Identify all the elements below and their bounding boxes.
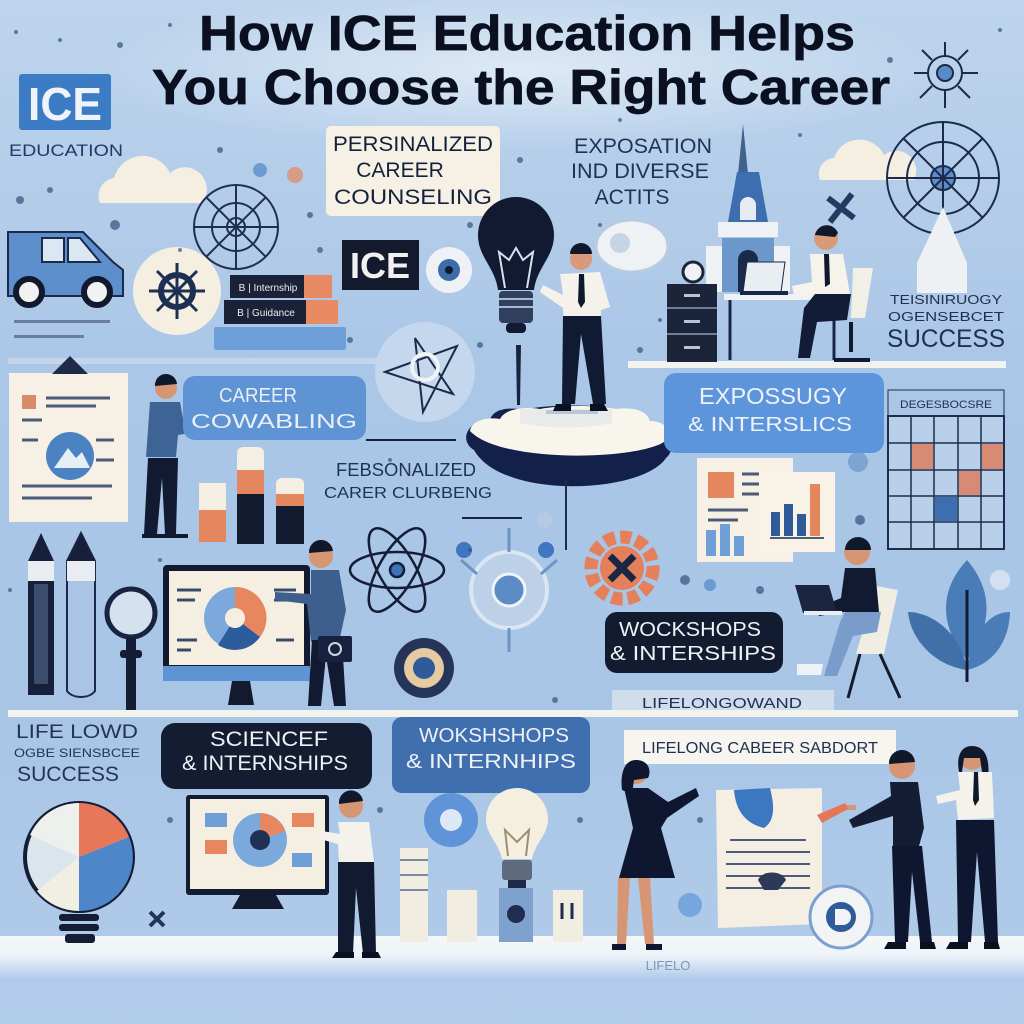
- document clipboard: [9, 356, 128, 522]
- text block: exposure in diverse: EXPOSATION: [574, 135, 712, 158]
- icon: books stack: B | Internship: [239, 283, 298, 294]
- pedestal cloud: [466, 406, 672, 550]
- atom icon: [350, 520, 444, 620]
- X icon near top: [828, 194, 854, 222]
- monitor with pie chart: [163, 565, 310, 705]
- icon: starburst badge: [133, 247, 221, 335]
- person: woman in dress: [612, 760, 699, 950]
- logo: ICE Education: ICE: [28, 78, 102, 130]
- label panel: career counseling: CAREER: [219, 385, 297, 407]
- label panel: workshops internships center: WOKSHSHOPS: [419, 725, 569, 747]
- callout: personalized career counseling: PERSINALIZED: [333, 133, 493, 156]
- icon: lightbulb: [478, 197, 554, 333]
- label panel: exposure internships: & INTERSLICS: [688, 414, 852, 436]
- pin pointer: [516, 345, 521, 405]
- label panel: career counseling: COWABLING: [191, 411, 357, 433]
- person: man with microphone: [817, 750, 936, 949]
- divider lower: [8, 710, 1018, 717]
- floor text: LIFELO: [646, 958, 690, 973]
- label panel: sciences internships: [161, 723, 372, 789]
- icon: van: [8, 232, 123, 305]
- text block: life success: LIFE LOWD: [16, 722, 138, 743]
- label panel: sciences internships: & INTERNSHIPS: [182, 752, 348, 775]
- text block: exposure in diverse: IND DIVERSE: [571, 160, 709, 183]
- blocks and chess pieces: [400, 848, 583, 942]
- small X mark icon: [150, 912, 164, 926]
- text block: technology success: [887, 292, 1005, 353]
- label panel: workshops internships: [605, 612, 783, 673]
- oval mirror icon: [596, 220, 668, 272]
- person: man presenting lower: [320, 790, 381, 958]
- ICE sign: ICE: [350, 245, 410, 286]
- text block: technology success: OGENSEBCET: [888, 309, 1004, 324]
- report papers with bar chart: [697, 458, 835, 562]
- gear icon orange: [591, 537, 653, 599]
- monitor lower: [186, 795, 329, 909]
- label panel: workshops internships center: [392, 717, 590, 793]
- text block: personalized career: [324, 460, 492, 502]
- calendar grid: DEGESBOCSRE: [900, 399, 992, 411]
- icon: eye badge: [426, 247, 472, 293]
- radar wheel top right: [887, 122, 999, 234]
- gear badge: [394, 638, 454, 698]
- floor band: [0, 936, 1024, 978]
- person: man at desk: [724, 225, 873, 360]
- title: You Choose the Right Career: [152, 61, 890, 115]
- tower building: [706, 124, 790, 292]
- text block: lifelong: [612, 690, 834, 712]
- text block: life success: OGBE SIENSBCEE: [14, 746, 140, 760]
- divider left: [8, 358, 460, 364]
- icon: spider wheel: [194, 185, 278, 269]
- text block: exposure in diverse: [571, 135, 712, 209]
- bar chart: three tubes: [199, 447, 304, 544]
- icon: books stack: [214, 275, 346, 350]
- text block: life success: [14, 722, 140, 786]
- small bars under van: [14, 320, 110, 338]
- blue splash icon: [424, 793, 478, 847]
- label panel: exposure internships: [664, 373, 884, 453]
- divider under row: [462, 517, 522, 519]
- icon: magnifying glass: [107, 589, 155, 710]
- logo: ICE Education: EDUCATION: [9, 141, 123, 160]
- text block: lifelong: LIFELONGOWAND: [642, 695, 802, 712]
- text block: personalized career: CARER CLURBENG: [324, 485, 492, 502]
- person: man with laptop on chair: [795, 537, 900, 698]
- label panel: sciences internships: SCIENCEF: [210, 728, 328, 751]
- divider right: [628, 361, 1006, 368]
- title: How ICE Education Helps: [199, 7, 855, 61]
- text block: life success: SUCCESS: [17, 763, 119, 786]
- label: lifelong career support: LIFELONG CABEER SABDORT: [642, 740, 878, 757]
- pie chart gauge with bulb base: [25, 803, 133, 943]
- text block: exposure in diverse: ACTITS: [595, 186, 669, 209]
- filing cabinet: [667, 262, 717, 362]
- label panel: exposure internships: EXPOSSUGY: [699, 383, 847, 409]
- network star icon: [375, 322, 475, 422]
- calendar grid: [888, 390, 1004, 549]
- callout: personalized career counseling: [326, 126, 500, 216]
- label panel: workshops internships: & INTERSHIPS: [610, 643, 776, 665]
- document with lines: [716, 788, 822, 928]
- label panel: career counseling: [183, 376, 456, 440]
- callout: personalized career counseling: COUNSELING: [334, 186, 492, 209]
- ICE sign: [342, 240, 419, 290]
- title: [152, 7, 890, 115]
- label: lifelong career support: [624, 730, 896, 764]
- lightbulb lower: [486, 788, 548, 888]
- person: standing man on podium: [540, 243, 610, 411]
- person: woman in white shirt: [936, 746, 1000, 949]
- label panel: workshops internships: WOCKSHOPS: [619, 619, 761, 641]
- person: man with tablet: [142, 374, 202, 538]
- rocket cone: [917, 207, 967, 293]
- text block: technology success: TEISINIRUOGY: [890, 292, 1002, 307]
- round badge: [810, 886, 872, 948]
- network globe icon: [456, 528, 557, 652]
- leaf plant: [908, 560, 1010, 682]
- icon: target top right: [914, 42, 978, 108]
- cloud right: [819, 140, 916, 180]
- person: presenter with briefcase: [275, 540, 352, 706]
- label panel: workshops internships center: & INTERNHIPS: [406, 751, 576, 773]
- callout: personalized career counseling: CAREER: [356, 159, 444, 182]
- icon: pencils: [28, 533, 95, 697]
- text block: technology success: SUCCESS: [887, 325, 1005, 353]
- icon: books stack: B | Guidance: [237, 308, 295, 319]
- cloud left: [99, 156, 207, 203]
- logo: ICE Education: [9, 74, 123, 160]
- text block: personalized career: FEBSONALIZED: [336, 460, 476, 480]
